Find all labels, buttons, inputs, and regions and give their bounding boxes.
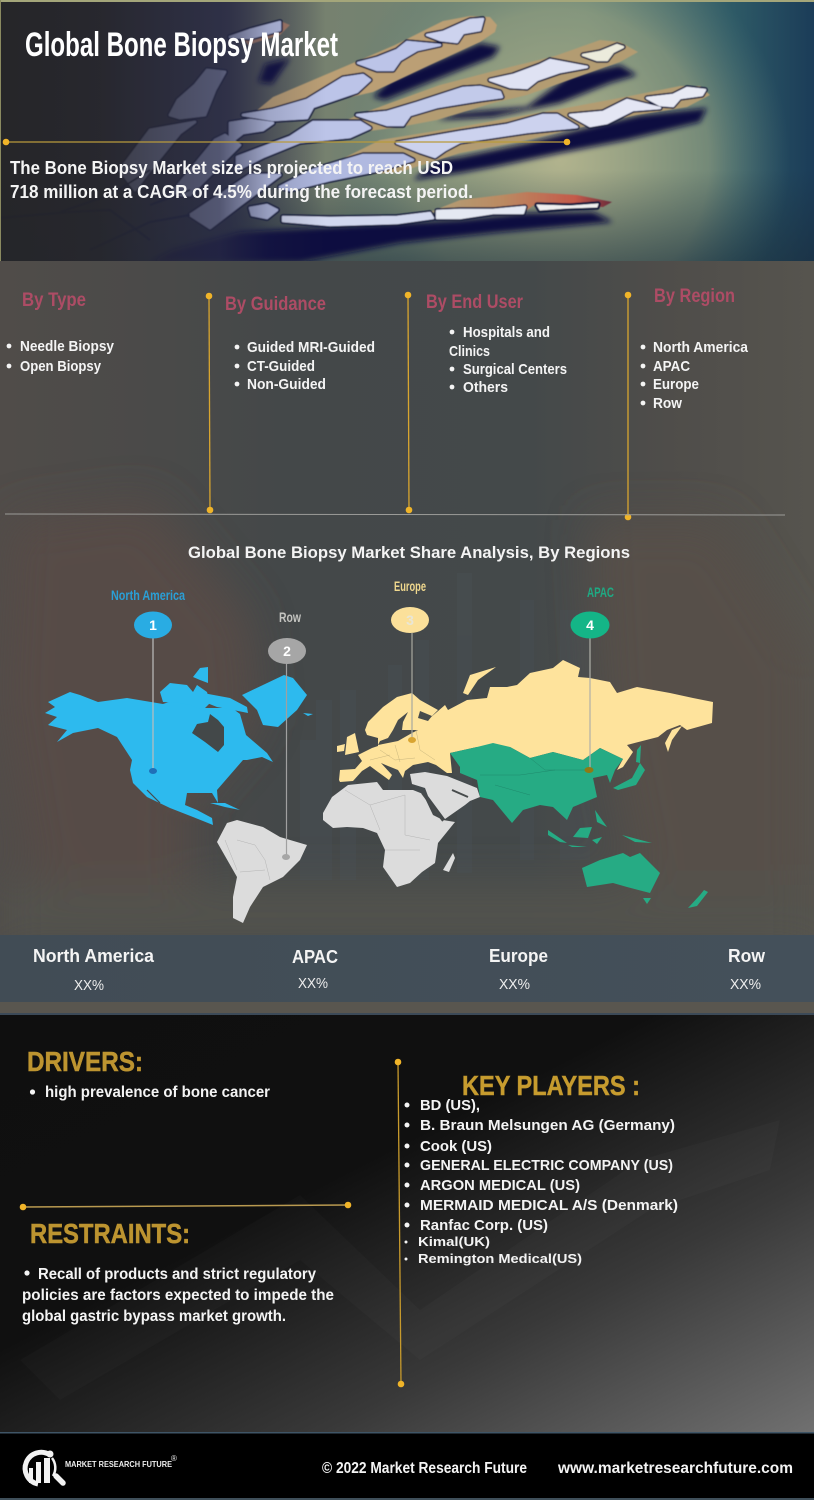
marker: north america: 1 [149, 617, 157, 633]
panel: segmentation and map background [0, 261, 814, 1015]
divider: key players line [395, 1059, 404, 1387]
column: by type: By Type [22, 290, 86, 311]
marker: north america: North America [111, 587, 185, 603]
map: africa and middle east [323, 772, 480, 887]
column: by type [7, 290, 115, 375]
divider: drivers and restraints [20, 1202, 351, 1210]
column: by guidance: CT-Guided [247, 358, 315, 375]
stat: north america: North America [33, 946, 155, 966]
block: restraints: policies are factors expected to impede the [22, 1287, 334, 1304]
column: by guidance [225, 294, 375, 393]
stat: apac: APAC [292, 947, 338, 967]
heading: share analysis: Global Bone Biopsy Market Share Analysis, By Regions [188, 543, 630, 562]
stat: europe [489, 946, 548, 993]
column: by region: Row [653, 395, 682, 412]
block: restraints [22, 1218, 334, 1325]
block: key players: MERMAID MEDICAL A/S (Denmark) [420, 1197, 678, 1214]
stat: row [728, 946, 766, 993]
block: key players: Kimal(UK) [418, 1235, 490, 1249]
column: by region: North America [653, 339, 749, 356]
column: by end user: Hospitals and [463, 324, 550, 341]
text: copyright: © 2022 Market Research Future [322, 1460, 527, 1477]
column: by end user: Others [463, 379, 508, 396]
column: by guidance: Guided MRI-Guided [247, 339, 375, 356]
divider: guidance line [206, 293, 213, 513]
block: restraints: RESTRAINTS: [30, 1218, 190, 1249]
icon: x-ray hand illustration [0, 16, 710, 262]
block: key players: Cook (US) [420, 1138, 492, 1155]
text block: market size summary [10, 158, 473, 202]
text block: market size summary: The Bone Biopsy Market size is projected to reach USD [10, 158, 453, 178]
text: website: www.marketresearchfuture.com [557, 1460, 793, 1477]
column: by type: Open Biopsy [20, 358, 102, 375]
marker: apac [570, 584, 614, 773]
stat: apac [292, 947, 338, 992]
stat: row: Row [728, 946, 766, 966]
icon: market research future logo: ® [171, 1454, 177, 1463]
panel: header with x-ray hand [0, 0, 814, 262]
column: by region: Europe [653, 376, 699, 393]
marker: apac: APAC [587, 584, 614, 600]
block: key players: B. Braun Melsungen AG (Germany) [420, 1117, 675, 1134]
column: by end user: Clinics [449, 343, 490, 360]
column: by region: By Region [654, 286, 735, 307]
block: key players: ARGON MEDICAL (US) [420, 1177, 580, 1194]
block: key players: BD (US), [420, 1097, 480, 1114]
divider: region line [625, 292, 631, 520]
column: by guidance: Non-Guided [247, 376, 326, 393]
map: north america [45, 667, 313, 825]
column: by end user: Surgical Centers [463, 361, 567, 378]
block: drivers: high prevalence of bone cancer [45, 1084, 270, 1101]
marker: row: Row [279, 609, 301, 625]
block: key players: KEY PLAYERS : [462, 1070, 640, 1101]
marker: apac: 4 [586, 617, 594, 633]
footer [0, 1432, 814, 1500]
marker: europe: Europe [394, 578, 426, 594]
divider: end user line [405, 292, 412, 513]
chart: world map by region [45, 578, 713, 923]
title: Global Bone Biopsy Market [25, 26, 338, 64]
marker: europe [391, 578, 429, 743]
marker: north america [111, 587, 185, 774]
column: by region [641, 286, 749, 412]
map: asia pacific [450, 743, 708, 908]
block: key players: GENERAL ELECTRIC COMPANY (US) [420, 1157, 673, 1174]
block: drivers [27, 1046, 270, 1101]
block: restraints: global gastric bypass market growth. [22, 1308, 286, 1325]
icon: market research future logo [25, 1450, 177, 1484]
stat: north america: XX% [74, 977, 104, 994]
block: key players: Remington Medical(US) [418, 1252, 582, 1266]
column: by end user: By End User [426, 292, 524, 313]
stat: europe: XX% [499, 976, 530, 993]
panel: regional shares [0, 935, 814, 1015]
marker: europe: 3 [406, 612, 414, 628]
column: by type: Needle Biopsy [20, 338, 115, 355]
block: key players [404, 1070, 678, 1266]
stat: row: XX% [730, 976, 761, 993]
column: by region: APAC [653, 358, 690, 375]
stat: apac: XX% [298, 975, 328, 992]
marker: row [268, 609, 306, 860]
block: restraints: Recall of products and strict regulatory [38, 1266, 316, 1283]
text block: market size summary: 718 million at a CAGR of 4.5% during the forecast period. [10, 182, 473, 202]
marker: row: 2 [283, 643, 291, 659]
map: south america [217, 820, 307, 923]
panel: market segments [7, 286, 749, 520]
panel: drivers, restraints and key players [0, 1015, 814, 1432]
icon: market research future logo: MARKET RESEARCH FUTURE [65, 1460, 173, 1469]
column: by end user [426, 292, 567, 396]
map: europe and russia [337, 660, 713, 782]
block: key players: Ranfac Corp. (US) [420, 1217, 548, 1234]
decorative gold rule [3, 139, 570, 145]
stat: europe: Europe [489, 946, 548, 966]
block: drivers: DRIVERS: [27, 1046, 143, 1077]
column: by guidance: By Guidance [225, 294, 326, 315]
stat: north america [33, 946, 155, 994]
